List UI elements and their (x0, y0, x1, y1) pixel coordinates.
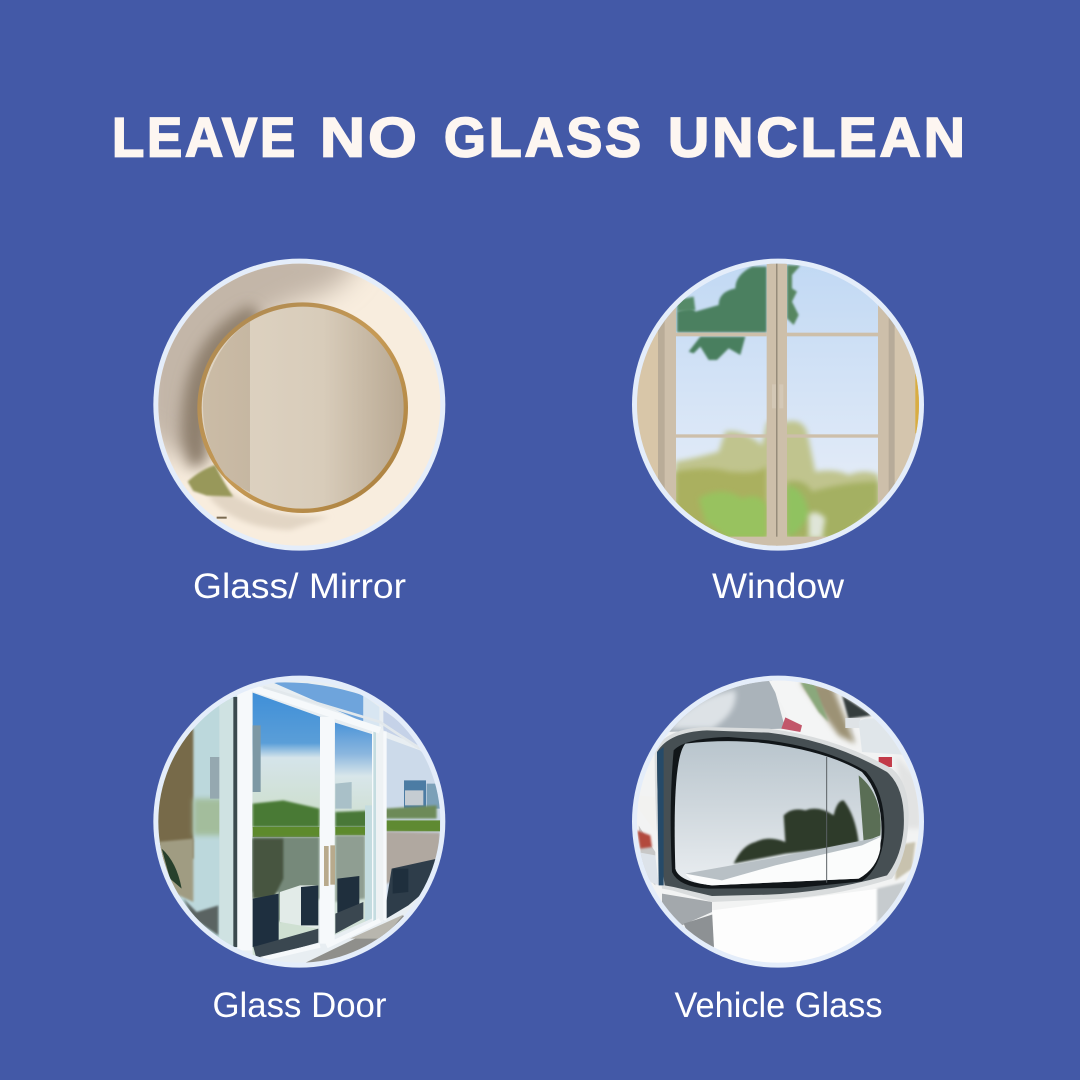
photo circle: window with trees (629, 255, 931, 557)
side curtains / frame (637, 330, 658, 480)
title: NO (320, 106, 420, 168)
panel: glass/mirror (153, 258, 446, 598)
pane 3 (386, 738, 440, 900)
bars (676, 333, 767, 336)
photo circle: car side mirror (629, 672, 929, 972)
label: Glass Door (212, 986, 387, 1025)
door below (662, 894, 712, 925)
label: Vehicle Glass (674, 986, 882, 1025)
photo circle: round mirror on wall (153, 258, 446, 551)
mullion (767, 255, 787, 555)
left glass (157, 692, 237, 959)
pane 1 (253, 693, 321, 959)
photo circle: sliding glass door (150, 672, 450, 972)
panel: glass door (150, 672, 450, 1025)
housing (655, 727, 909, 902)
pane 2 (334, 722, 372, 935)
title: UNCLEAN (668, 106, 968, 168)
label: Glass/ Mirror (193, 567, 406, 606)
panel: window (629, 255, 931, 606)
title: GLASS (444, 106, 644, 168)
glass (675, 741, 882, 885)
handles (324, 846, 329, 886)
panel: vehicle glass (629, 672, 929, 1025)
background cars (662, 680, 785, 732)
frame (245, 687, 379, 950)
title (112, 106, 968, 168)
trees lower (675, 421, 879, 538)
transom (273, 682, 363, 722)
label: Window (712, 567, 845, 606)
title: LEAVE (112, 106, 298, 168)
tree upper (677, 267, 767, 332)
